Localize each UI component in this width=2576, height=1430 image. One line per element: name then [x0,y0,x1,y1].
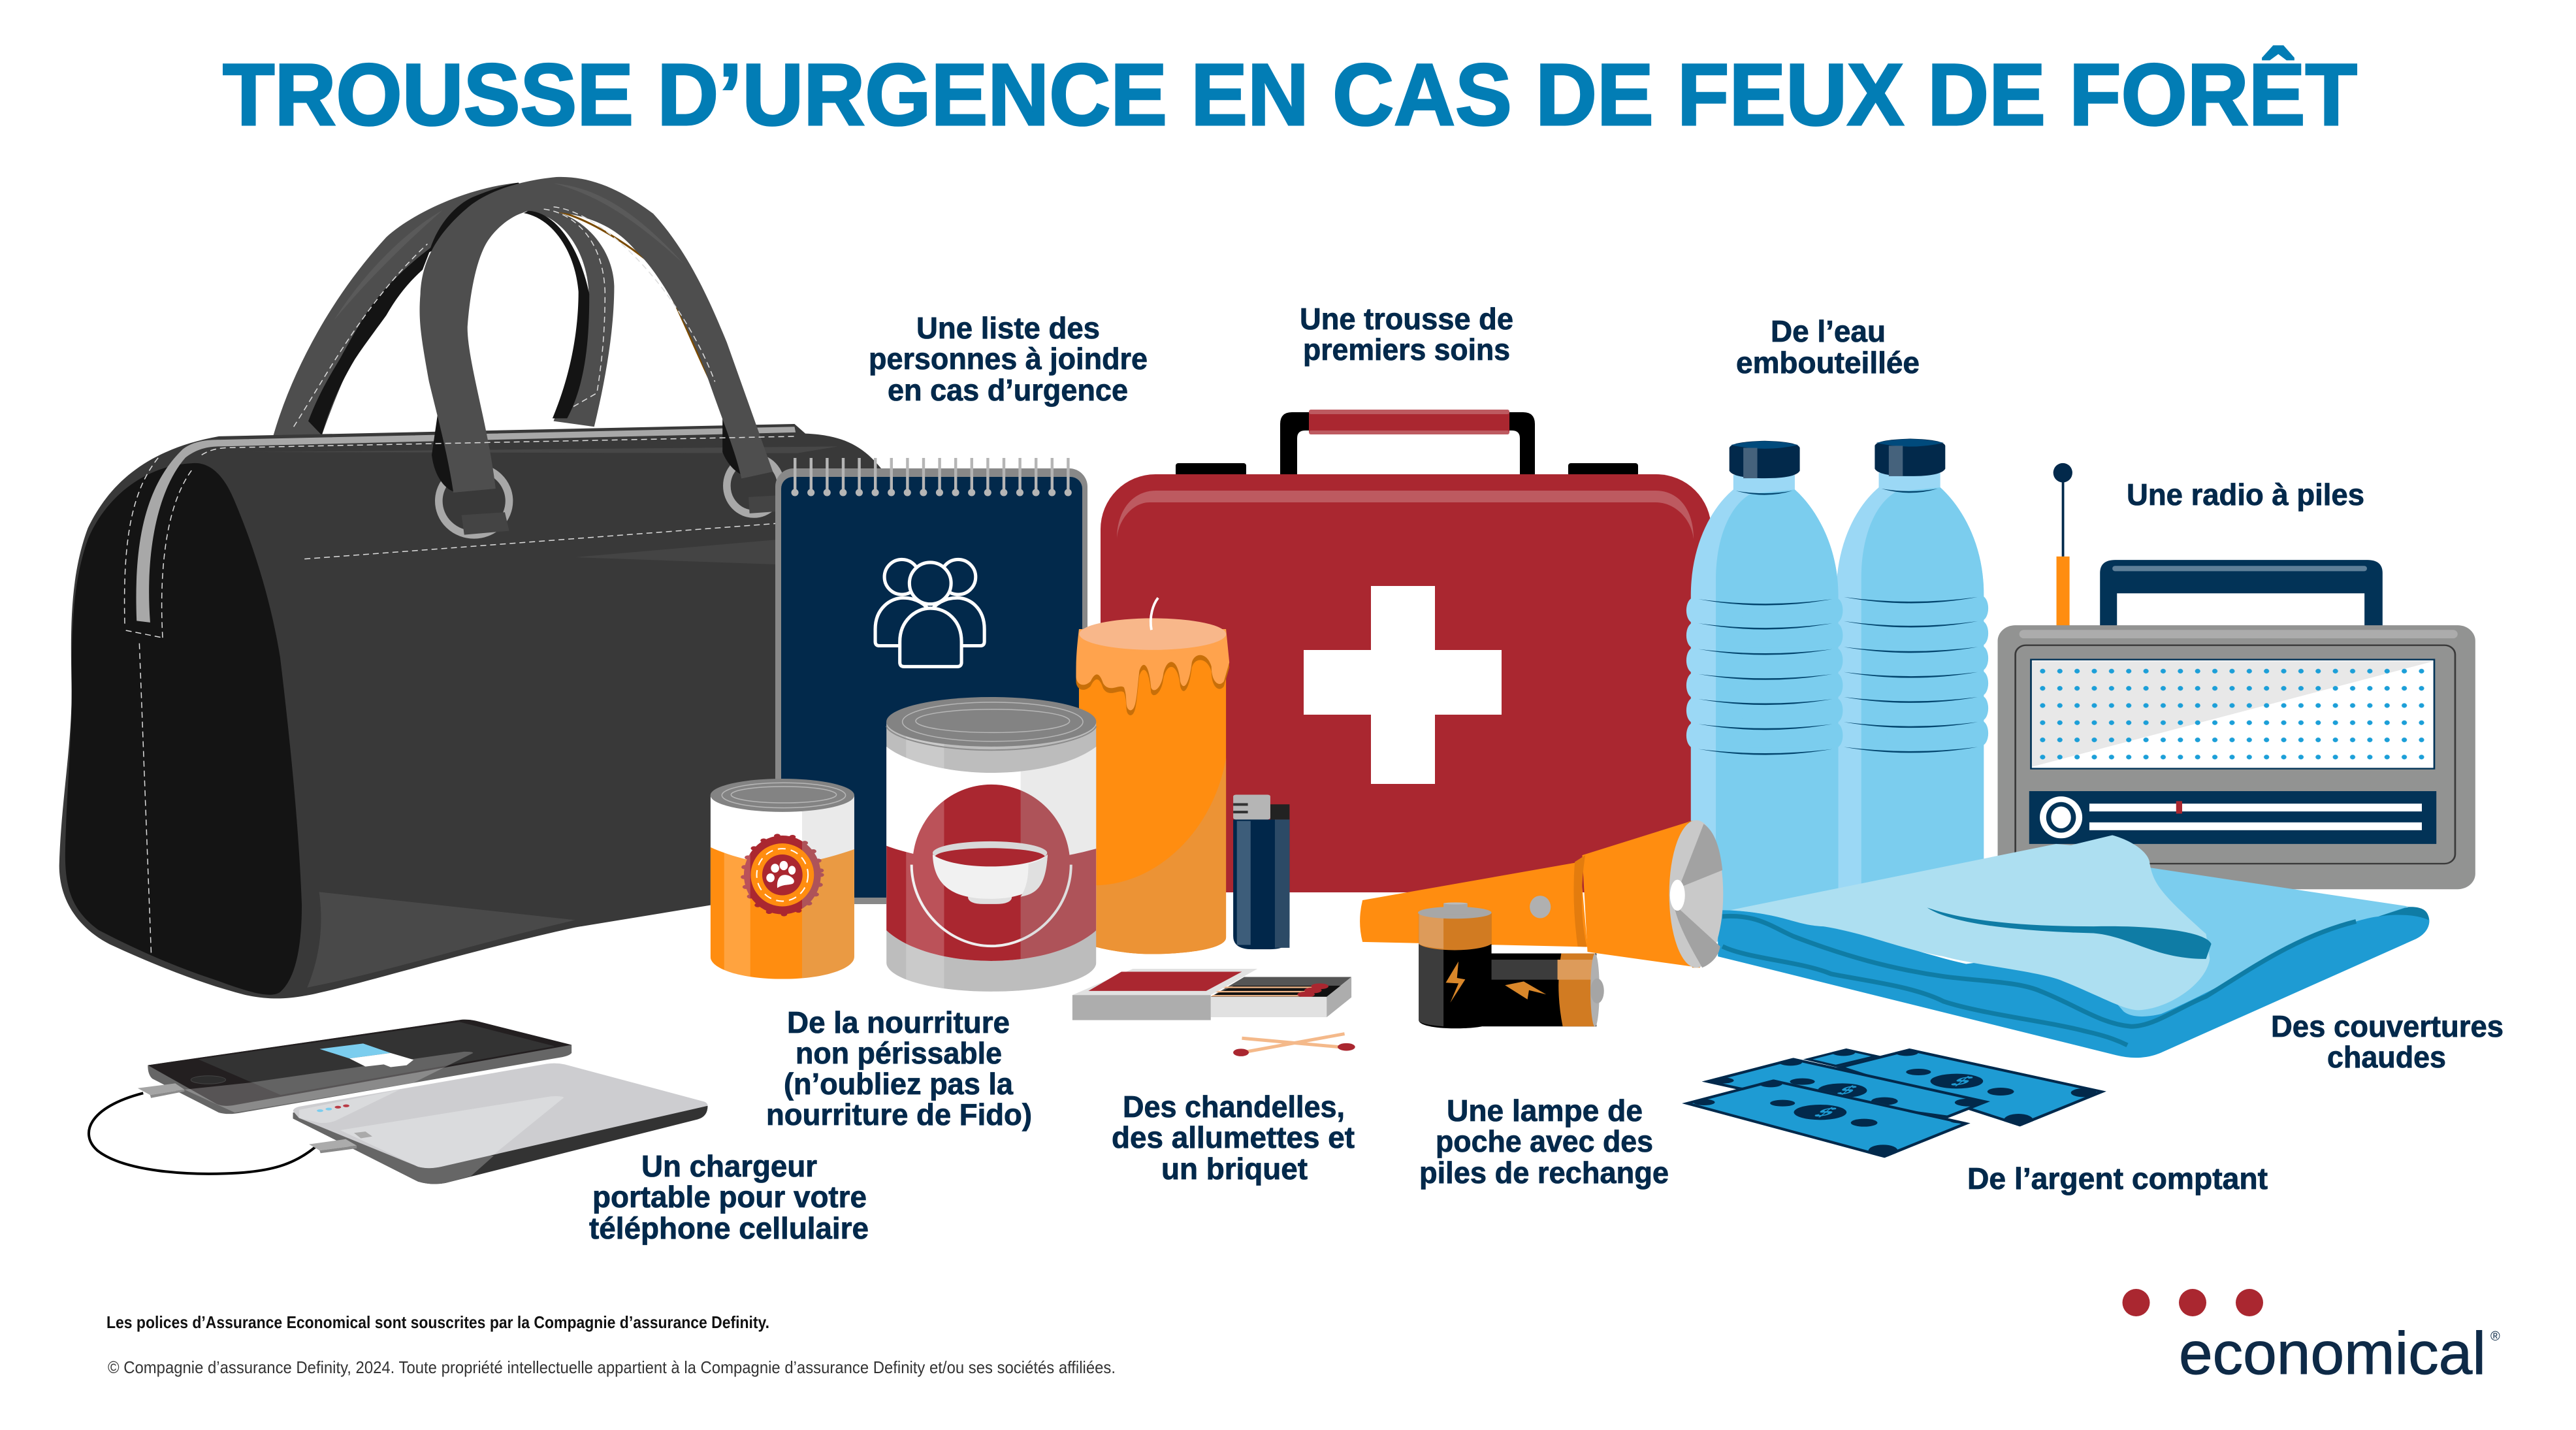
label: flashlight: Une lampe de [1447,1094,1643,1128]
rings [439,467,509,535]
label: candles [1112,1090,1355,1186]
label: cash: De l’argent comptant [1967,1162,2268,1195]
label: candles: un briquet [1161,1152,1308,1186]
label: food: nourriture de Fido) [766,1097,1032,1131]
illustration: duffel bag [59,177,884,998]
back handle [273,183,614,436]
logo: economical: ® [2490,1329,2500,1344]
bill front [1682,1079,1971,1158]
label: candles: des allumettes et [1112,1120,1355,1154]
label: contact list [869,311,1148,407]
speaker grille [2031,660,2434,769]
illustration: lighter [1233,795,1289,949]
illustration: large food can [886,697,1096,1003]
zipper [136,427,796,623]
label: radio: Une radio à piles [2127,478,2364,512]
illustration: banknotes: $ [1808,1104,1843,1120]
loose matches [1233,1034,1355,1056]
label: contact list: Une liste des [916,311,1100,345]
label: flashlight: piles de rechange [1419,1156,1669,1190]
title: TROUSSE D’URGENCE EN CAS DE FEUX DE FORÊT [223,46,2357,144]
icon: paw [766,861,796,888]
illustration: pet food can [711,779,854,988]
phone [138,1020,572,1114]
label: candles: Des chandelles, [1123,1090,1345,1124]
illustration: candle [1076,598,1229,954]
label: charger: Un chargeur [641,1149,817,1183]
label: blankets: chaudes [2327,1040,2446,1074]
illustration: banknotes: $ [1944,1073,1980,1089]
icon: white cross [1304,586,1502,784]
horizontal battery [1480,953,1604,1027]
footer: underwriting note: Les polices d’Assurance Economical sont souscrites par la Compagnie d’assurance Definity. [106,1312,769,1332]
label: contact list: en cas d’urgence [888,373,1128,407]
label: contact list: personnes à joindre [869,342,1148,376]
lid [886,726,1096,750]
bill middle [1702,1058,1990,1118]
label: blankets: Des couvertures [2271,1009,2504,1043]
illustration: water bottles [1686,439,1988,941]
label: flashlight [1419,1094,1669,1190]
label: bottled water: embouteillée [1736,346,1920,380]
illustration: notebook [775,468,1087,904]
dial panel [2029,791,2436,844]
stitching [125,207,797,956]
cable [89,1093,315,1174]
illustration: blanket [1718,835,2429,1058]
label: food [766,1005,1032,1131]
label: first aid kit: premiers soins [1303,333,1510,366]
illustration: first aid kit [1101,410,1711,892]
illustration: banknotes: $ [1831,1082,1863,1098]
label: flashlight: poche avec des [1436,1124,1653,1158]
label: food: non périssable [796,1036,1002,1070]
label: blankets [2271,1009,2504,1074]
label: food: (n’oubliez pas la [784,1067,1013,1101]
label: first aid kit [1300,302,1513,366]
logo: economical: economical [2179,1320,2486,1387]
illustration: phone and power bank [89,1020,708,1184]
front handle [420,177,773,493]
side panel [65,463,302,995]
footer: copyright: © Compagnie d’assurance Definity, 2024. Toute propriété intellectuelle appartient à la Compagnie d’assurance Definity et/ou ses sociétés affiliées. [108,1357,1116,1377]
illustration: matches [1072,969,1355,1056]
icon: group of people [875,559,984,666]
illustration: flashlight [1360,820,1723,967]
label: food: De la nourriture [787,1005,1010,1039]
bill back [1836,1048,2106,1127]
bottle right [1832,439,1988,939]
label oval [913,784,1070,859]
icon: soup bowl [933,841,1048,904]
illustration: batteries [1418,902,1604,1028]
power bank [293,1064,708,1184]
illustration: banknotes [1682,1048,2106,1158]
label: bottled water [1736,314,1920,380]
logo: economical [2123,1289,2500,1387]
label: bottled water: De l’eau [1771,314,1886,348]
bill small back [1803,1048,1881,1067]
illustration: radio [1998,463,2475,889]
label: charger [589,1149,869,1245]
leg shadows [432,410,462,491]
bottle left [1686,441,1843,941]
fold shadows [1722,916,2356,1045]
badge [744,836,821,915]
label: charger: téléphone cellulaire [589,1211,869,1245]
label: first aid kit: Une trousse de [1300,302,1513,336]
vertical battery [1418,902,1492,1028]
label: charger: portable pour votre [592,1180,867,1214]
